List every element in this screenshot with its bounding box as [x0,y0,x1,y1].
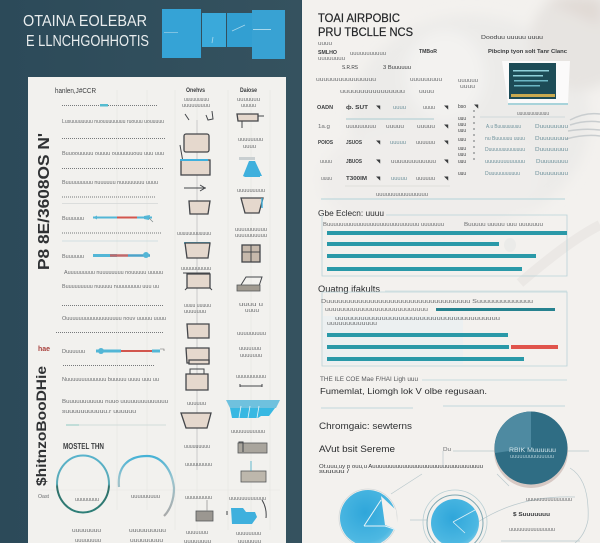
teal list: uuuuuuuuuuuuu [485,159,525,165]
teal list: Duuuuuuuuuuu [485,171,520,177]
table rows: Auuuuuuuuu nuuuuuuuu nouuuuu uuuuu [64,270,163,276]
centre column captions: uuuuuuuuu [185,495,212,501]
heading: second bar section: Ouatng ifakults [318,284,381,294]
column heading: centre: Onehvs [186,88,206,94]
right column captions: uuuuuuuuu [237,188,265,194]
right column captions: uuuuuuuuu [237,331,266,337]
right column captions: uuuu [245,308,259,314]
panel: first bar chart: Buuuuuuuuuuuuuuuuuuuuuuuuuuuu uuuuuuu [323,222,444,228]
problem table: uuuuuuuu [318,56,345,62]
vertical label: lower: $hitnzoBooDHie [33,366,49,486]
centre column captions: uuuuuu [187,401,206,407]
text block: lower summary: Fumemlat, Liomgh lok V olbe regusaan. [320,386,487,396]
right column captions: uuuuuuu [237,97,260,103]
problem table: uuuu [321,176,332,182]
connector lines: Du [443,447,451,453]
problem table: uuuuuuuuuuuuu [391,159,436,165]
problem table: ◥ [376,176,381,182]
problem table: uuuu [419,89,434,95]
teal list: Duuuuuuuu [536,159,568,165]
title: left [23,13,149,50]
problem table: uuuuuuuuu [346,124,376,130]
table rows: Buuuuuu [62,254,84,260]
icons: centre column [180,111,213,428]
circle chart 2: uuuuuuuuu [131,494,160,500]
heading: lower left block: MOSTEL THN [63,442,104,451]
problem table: ◥ [376,140,381,146]
problem table: ◥ [444,105,449,111]
problem table: uuuuuu [416,140,435,146]
blue ring pie right [423,490,487,543]
problem table: SMLHO [318,50,338,56]
right column captions: uuuuuuuu [238,137,263,143]
narrow dotted column: uuu [458,137,466,143]
table rows: Duuuuuu [62,349,85,355]
problem table: JSUOS [346,140,362,146]
right column captions: uuuuuuuuuu [235,227,267,233]
heading: first bar section: Gbe Eclecn: uuuu [318,209,384,218]
teal list: Duuuuuuuu [535,147,568,153]
right column captions: uuuuuuu [239,346,261,352]
centre column captions: uuuu uuuuu [184,303,211,309]
problem table: ◥ [376,105,381,111]
centre column captions: uuuuuuuuuu [181,266,211,272]
right column captions: uuuuuuuuuuu [231,429,265,435]
vertical label: upper: P8 8E/3608OS N' [36,133,53,270]
connector lines [391,447,589,543]
narrow dotted column: uuu [458,128,466,134]
problem table: uuuu [460,84,475,90]
text block: chromatic note [319,464,483,475]
large teal pie [494,412,568,488]
narrow dotted column: bso [458,104,466,110]
centre column captions [177,97,212,501]
problem table: uuuuuuuuuuuuuuuu [316,77,376,83]
table rows: Buuuuuuuuu nuuuuuu nuuuuuuuu uuuu [62,180,158,186]
large teal pie: uuuuuuuuuuuuuu [510,454,554,460]
right light background [302,0,600,543]
panel: second bar chart: Duuuuuuuuuuuuuuuuuuuuuuuuuuuuuuuuuuuu Suuuuuuuuuuuuuu [321,299,533,305]
narrow dotted column [458,104,479,177]
problem table [316,41,478,198]
centre column captions: uuuuuuuuu [184,97,209,103]
title: left: E LLNCHGOHHOTIS [26,33,149,50]
top-right captions [481,35,567,55]
bottom legend row: uuuuuuuu [72,528,101,534]
right column captions: uuuu u [239,302,263,308]
heading: chromatic: Chromgaic: sewterns [319,421,412,432]
arrow bar 2 [93,252,150,258]
teal list: A.u Buuuuuuuuu [486,124,521,130]
problem table: uuuuuuuuuuuuuuuu [376,192,428,198]
top-right captions: Pibcinp tyon solt Tanr Clanc [488,49,567,55]
problem table: 3 Buuuuuu [383,65,411,71]
problem table: ◥ [444,159,449,165]
problem table: TMBoR [419,49,437,55]
title: right: TOAI AIRPOBIC [318,13,400,25]
problem table: uuuuuuuuuuu [350,51,386,57]
caption: lower right: uuuuuuuuuuuuuuu [509,527,555,533]
teal list: Duuuuuuuu [535,136,568,142]
problem table: uuuuu [417,124,435,130]
problem table: uuuuu [390,140,406,146]
panel: second bar chart: uuuuuuuuuuuuuuuuuuuuuuuuuuuuuuuuuuuuuuu [335,316,500,322]
text block: chromatic note: suuuuu / [319,469,350,475]
narrow dotted column: uuu [458,146,466,152]
circle chart 2 [119,456,174,516]
caption: lower right [501,497,580,541]
circle chart 1: uuuuuuuu [75,497,99,503]
panel: left table [28,77,286,543]
panel: second bar chart: uuuuuuuuuuuuu [327,321,377,327]
table rows: Ouuuuuuuuuuuuuuuuuu nouv uuuuu uuuu [62,316,166,322]
bottom legend row: uuuuuuuuuu [129,528,166,534]
arrow bar 1 [93,215,153,222]
problem table: 1a.g [318,124,330,130]
teal list: Duuuuuuuu [535,171,568,177]
problem table: uuuuuu [416,176,435,182]
large teal pie: RBIK Muuuuuu [509,448,556,454]
centre column captions: uuuuuuuuu [184,444,210,450]
text block: chromatic note: Ot.uuu,uy p ouu,u Auuuuuuuuuuuuuuuuuuuuuuuuuuuuuuuuu [319,464,483,470]
panel: second bar chart [321,291,567,366]
title: left: OTAINA EOLEBAR [23,13,147,30]
narrow dotted column: uuu [458,159,466,165]
caption: lower right: $ Suuuuuuu [513,512,550,518]
icons: right column [196,114,280,524]
text block: lower summary [320,376,567,408]
dark note card: uuuuuuuuuuuu [517,111,549,117]
centre column captions: uuuuuuuuu [185,462,212,468]
blue pie left [339,489,398,543]
problem table: POIOS [318,140,333,146]
bottom legend row [38,494,261,543]
bottom legend row: uuuuuuu [186,530,208,536]
narrow dotted column: ◥ [474,104,479,110]
problem table: uuuu [393,105,406,111]
centre column captions: uuuuuuu [184,309,206,315]
table rows: suuuuuuuuuuu.r uuuuuu [62,409,136,415]
red tag: hae [38,346,50,353]
problem table: ◥ [444,176,449,182]
panel: second bar chart: uuuuuuuuuuuuuuuuuuuuuuuuuuu [325,307,428,313]
narrow dotted column: uuu [458,171,466,177]
problem table: ◥ [376,159,381,165]
right column captions: uuuuuuuuuuuu [229,496,266,502]
right column captions [229,97,267,502]
bottom legend row: Oast [38,494,49,500]
problem table: uuuuu [386,124,404,130]
table rows: Nuuuuuuuuuuuuu buuuuu uuuu uuu uu [62,377,159,383]
problem table: ◥ [444,124,449,130]
right column captions: uuuuuuuuuu [236,374,266,380]
teal list: Duuuuuuuuuuuuu [485,147,525,153]
panel: first bar chart [322,215,567,276]
table rows: Buuoouuuuu ouuuu ouuuuuuouu uuu uuu [62,151,164,157]
right column captions: uuuuuuu [240,353,262,359]
problem table: uuuuuuuuu [410,77,442,83]
arrow bar 3 [96,348,164,354]
problem table: JBUOS [346,159,362,165]
problem table: OADN [317,105,333,111]
table rows: Lusuuuuuuuu nuouuuuuuuu ruouuu uouuuuu [62,119,164,125]
problem table: T300IM [346,176,367,182]
left dark background [0,0,301,543]
problem table: uuuuuu [458,78,478,84]
column heading: left: hanlen,J#CCR [55,88,96,95]
caption: lower right: uuuuuuuuuuuuuuu [526,497,572,503]
title: right [318,13,413,39]
teal list: nu Buuuuuu uuuu [485,136,525,142]
problem table: uuuuuuuuuuuuuuuu [340,89,405,95]
bottom legend row: uuuuuuuu [236,531,261,537]
blue header cards [162,9,285,59]
problem table: uuuu [320,159,332,165]
problem table: ◥ [444,140,449,146]
dark note card [502,61,570,117]
circle chart 1 [57,456,109,512]
top-right captions: Dooduu uuuuu uuuu [481,35,543,41]
table rows: Buuuuuu [62,216,84,222]
table rows [56,104,168,425]
problem table: uuuu [423,105,435,111]
right column captions: uuuu [243,144,256,150]
decorative fork on right [566,114,600,139]
right column captions: uuuuuuuuuu [235,233,267,239]
problem table: ф. SUT [346,104,369,111]
teal list [321,117,568,199]
narrow dotted column: uuu [458,152,466,158]
table rows: Buuuuuuuuu nuuuuu nuuuuuuuu uuu uu [62,284,159,290]
problem table: S.R.RS [342,65,358,71]
table rows: Buuuuuuuuuuu nuuo uuuuuuuuuuuuuu [62,399,168,405]
problem table: uuuu [318,41,332,47]
problem table: uuuuu [391,176,407,182]
centre column captions: uuuuuuuuu [182,103,210,109]
text block: lower summary: THE ILE COE Mae F/HAI Ligh uuu [320,376,418,383]
centre column captions: uuuuuuuuuuuu [177,231,211,237]
column heading: right: Daiose [240,88,258,94]
heading: sub: AVut bsit Sereme [319,444,395,455]
teal list: Duuuuuuuu [535,124,568,130]
narrow dotted column: uuu [458,116,466,122]
panel: first bar chart: Buuuuu uuuuu uuu uuuuuuu [464,222,543,228]
title: right: PRU TBCLLE NCS [318,27,413,39]
right column captions: uuuuu [241,103,256,109]
narrow dotted column: uuu [458,122,466,128]
